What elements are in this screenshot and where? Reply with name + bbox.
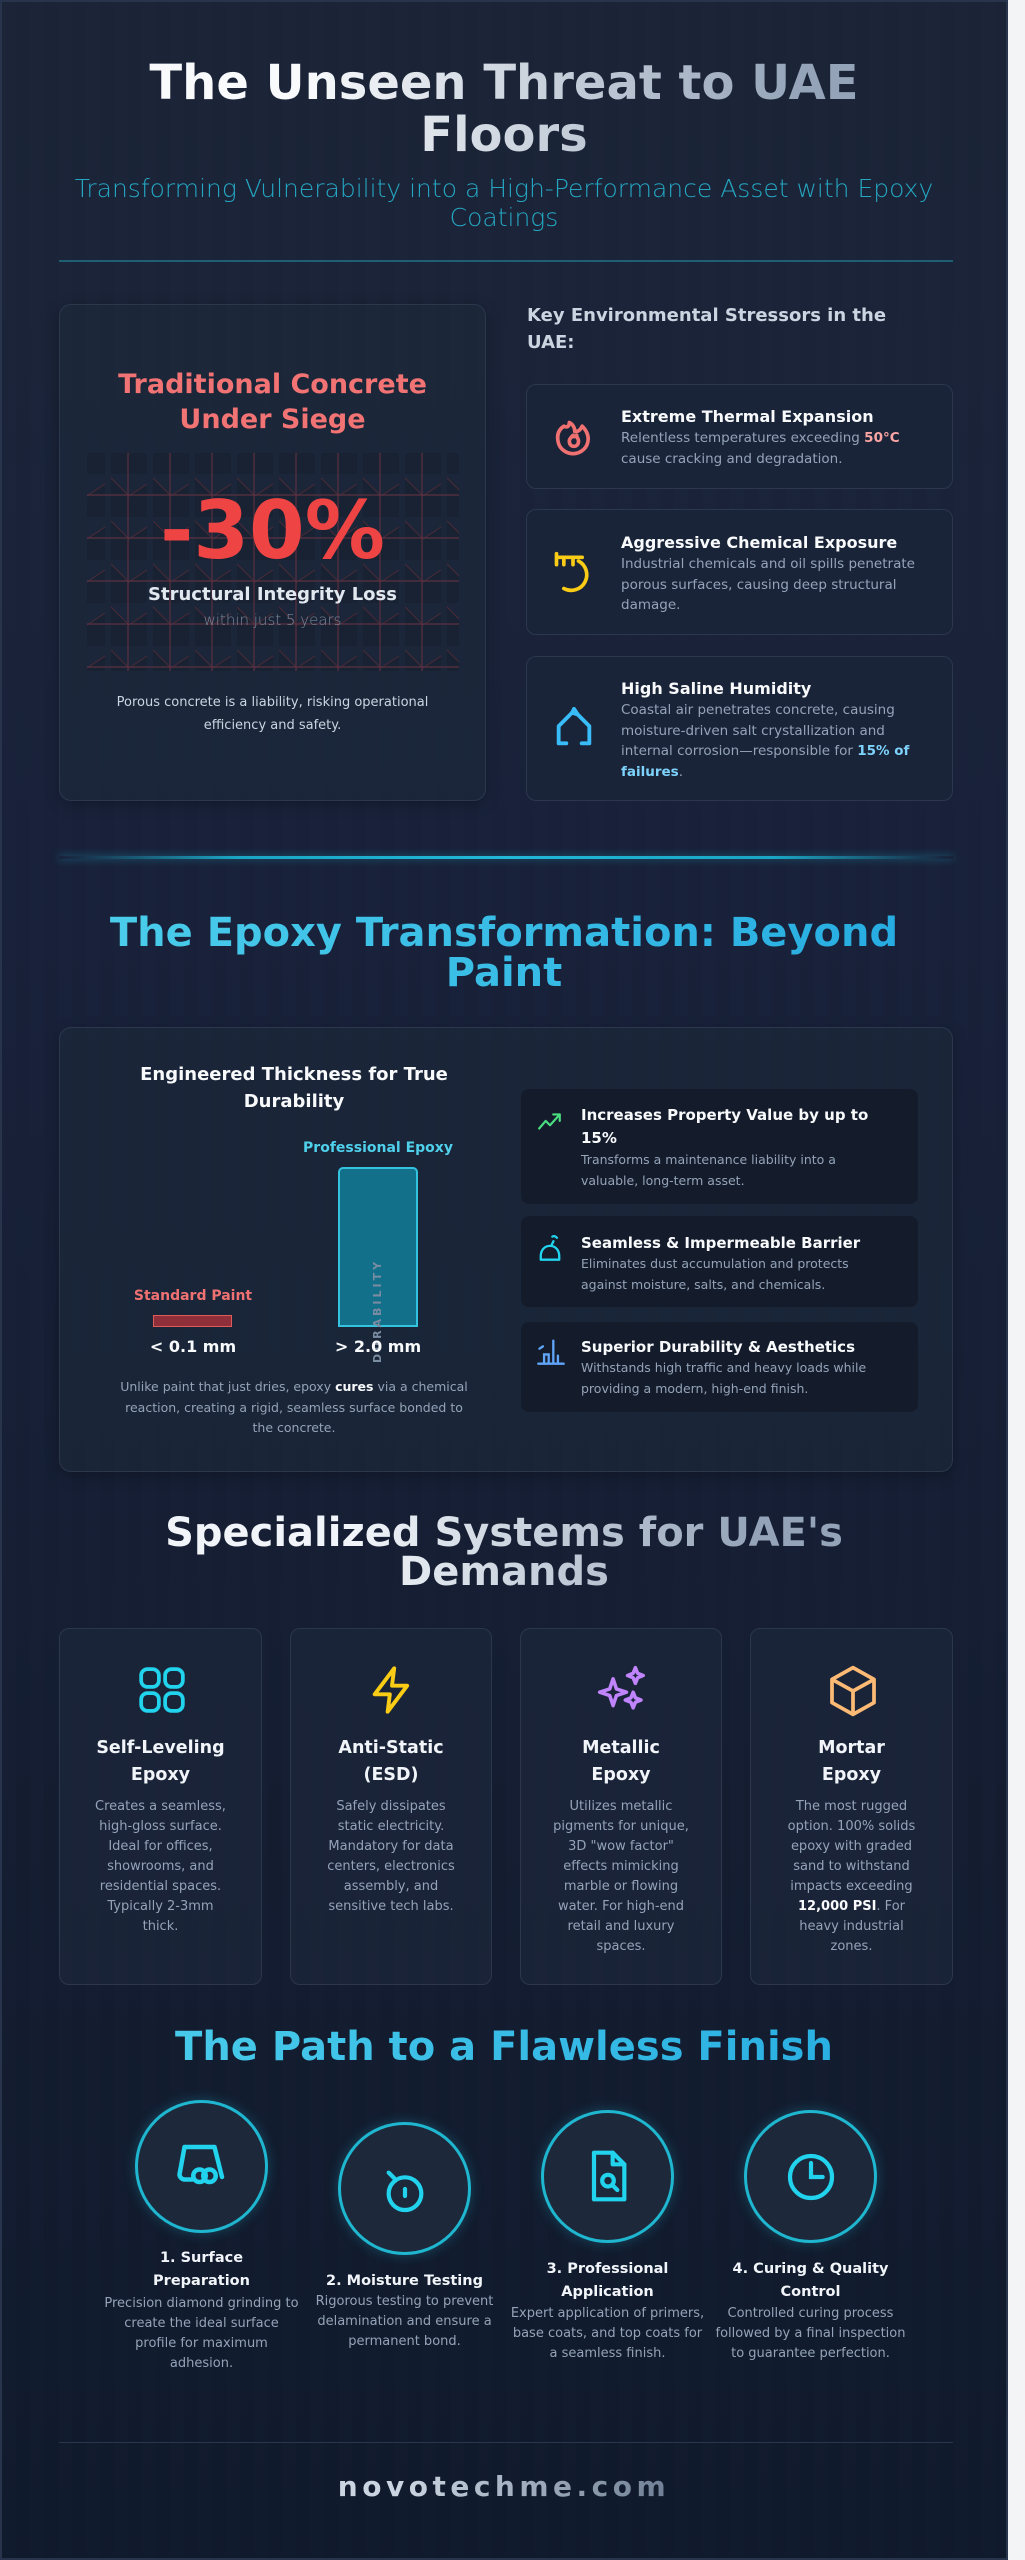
card: anti-static bbox=[290, 1628, 492, 1985]
title bbox=[2, 57, 1006, 161]
description: Porous concrete is a liability, risking operational bbox=[117, 695, 428, 710]
step description: to guarantee perfection. bbox=[731, 2346, 890, 2361]
icon: building chart bbox=[537, 1340, 565, 1365]
description: water. For high-end bbox=[558, 1899, 684, 1914]
step 4: curing & quality control bbox=[709, 2110, 912, 2370]
panel: traditional concrete bbox=[59, 304, 486, 801]
bar: paint bbox=[153, 1315, 232, 1327]
caption bbox=[120, 1379, 468, 1435]
footer: website: novotechme.com bbox=[338, 2470, 670, 2503]
description: heavy industrial bbox=[799, 1919, 904, 1934]
text: Transforms a maintenance liability into a bbox=[581, 1152, 836, 1167]
icon: shield barrier bbox=[540, 1235, 560, 1261]
description: Safely dissipates bbox=[336, 1799, 446, 1814]
title: Epoxy bbox=[822, 1765, 881, 1785]
text: Industrial chemicals and oil spills penetrate bbox=[621, 556, 915, 572]
step 2: moisture testing bbox=[316, 2117, 494, 2349]
section title: specialized systems: Demands bbox=[399, 1549, 609, 1595]
step title: 2. Moisture Testing bbox=[326, 2273, 483, 2289]
icon: cube bbox=[830, 1666, 876, 1716]
icon circle: clock bbox=[744, 2110, 877, 2243]
step description: adhesion. bbox=[170, 2356, 233, 2371]
heading: traditional concrete under siege bbox=[118, 369, 427, 435]
step description bbox=[511, 2306, 704, 2361]
description: 3D "wow factor" bbox=[568, 1839, 674, 1854]
section title: epoxy transformation: Paint bbox=[446, 950, 562, 996]
step description: Precision diamond grinding to bbox=[104, 2296, 299, 2311]
description: effects mimicking bbox=[563, 1859, 679, 1874]
description: Utilizes metallic bbox=[570, 1799, 672, 1814]
description: epoxy with graded bbox=[791, 1839, 912, 1854]
card: self-leveling bbox=[59, 1628, 262, 1985]
text: Withstands high traffic and heavy loads while bbox=[581, 1360, 866, 1375]
step 1: surface preparation bbox=[104, 2095, 299, 2371]
description: thick. bbox=[143, 1919, 178, 1934]
step description bbox=[104, 2296, 299, 2371]
card: property value bbox=[521, 1089, 918, 1204]
panel: epoxy comparison bbox=[59, 1027, 953, 1472]
text: Relentless temperatures exceeding 50°C bbox=[621, 430, 900, 446]
description: showrooms, and bbox=[107, 1859, 214, 1874]
icon circle: grinder bbox=[135, 2100, 268, 2233]
title: Mortar bbox=[818, 1738, 885, 1758]
step description: a seamless finish. bbox=[550, 2346, 665, 2361]
stat sublabel: within just 5 years bbox=[204, 611, 342, 629]
heading: key stressors: UAE: bbox=[527, 332, 574, 353]
step description: permanent bond. bbox=[348, 2334, 461, 2349]
description: pigments for unique, bbox=[553, 1819, 689, 1834]
description bbox=[553, 1799, 689, 1954]
heading: engineered thickness: Durability bbox=[244, 1091, 344, 1112]
card: saline humidity bbox=[526, 656, 953, 801]
text: cause cracking and degradation. bbox=[621, 450, 842, 466]
label: professional epoxy: Professional Epoxy bbox=[303, 1140, 453, 1156]
step title: Control bbox=[781, 2284, 840, 2300]
title bbox=[338, 1738, 444, 1785]
icon: house drop bbox=[556, 706, 592, 746]
card: chemical bbox=[526, 509, 953, 635]
bar chart: thickness bbox=[134, 1140, 453, 1363]
title: Metallic bbox=[582, 1738, 660, 1758]
description: option. 100% solids bbox=[788, 1819, 915, 1834]
description: zones. bbox=[831, 1939, 872, 1954]
footer: website bbox=[2, 2470, 1006, 2504]
step title bbox=[153, 2250, 250, 2289]
text: Superior Durability & Aesthetics bbox=[581, 1338, 855, 1356]
section title: specialized systems bbox=[2, 1514, 1006, 1592]
icon: trend up bbox=[538, 1113, 561, 1130]
text: Eliminates dust accumulation and protects bbox=[581, 1256, 849, 1271]
icon circle: stopwatch bbox=[338, 2122, 471, 2255]
title: Epoxy bbox=[131, 1765, 190, 1785]
title: The Unseen Threat to UAE bbox=[149, 55, 859, 111]
glow divider bbox=[59, 856, 953, 859]
description: spaces. bbox=[596, 1939, 646, 1954]
value labels: < 0.1 mm bbox=[150, 1337, 236, 1356]
heading: traditional concrete under siege: Under Siege bbox=[179, 404, 366, 435]
text bbox=[621, 533, 915, 613]
card: metallic bbox=[520, 1628, 722, 1985]
step 3: professional application bbox=[511, 2105, 704, 2361]
description bbox=[95, 1799, 226, 1934]
section title: path to flawless finish: The Path to a Flawless Finish bbox=[175, 2024, 833, 2070]
text bbox=[581, 1234, 860, 1292]
description bbox=[327, 1799, 455, 1914]
text: porous surfaces, causing deep structural bbox=[621, 576, 897, 592]
text: valuable, long-term asset. bbox=[581, 1172, 745, 1188]
step description: profile for maximum bbox=[135, 2336, 268, 2351]
description: Typically 2-3mm bbox=[107, 1899, 214, 1914]
step description: followed by a final inspection bbox=[716, 2326, 905, 2341]
description: centers, electronics bbox=[327, 1859, 455, 1874]
step title: 1. Surface bbox=[160, 2250, 243, 2266]
icon: sparkles bbox=[598, 1666, 645, 1710]
description: impacts exceeding bbox=[790, 1879, 913, 1894]
text: internal corrosion—responsible for 15% of bbox=[621, 743, 909, 759]
text: moisture-driven salt crystallization and bbox=[621, 722, 885, 738]
icon: flame bbox=[556, 420, 590, 456]
heading: engineered thickness: Engineered Thickness for True bbox=[140, 1064, 448, 1085]
text: 15% bbox=[581, 1129, 617, 1147]
title bbox=[582, 1738, 660, 1785]
description: static electricity. bbox=[338, 1819, 444, 1834]
stat: -30%: -30% bbox=[160, 484, 385, 577]
step description: delamination and ensure a bbox=[317, 2314, 492, 2329]
text: High Saline Humidity bbox=[621, 679, 811, 698]
text: providing a modern, high-end finish. bbox=[581, 1380, 808, 1396]
bar chart: thickness: > 2.0 mm bbox=[335, 1337, 421, 1356]
description: assembly, and bbox=[344, 1879, 438, 1894]
label: durability vertical: DURABILITY bbox=[371, 1259, 384, 1363]
caption: the concrete. bbox=[253, 1420, 335, 1435]
step description bbox=[316, 2294, 494, 2349]
title: Anti-Static bbox=[338, 1738, 444, 1758]
caption: reaction, creating a rigid, seamless surface bonded to bbox=[125, 1400, 463, 1414]
description: marble or flowing bbox=[564, 1879, 678, 1894]
step description: Expert application of primers, bbox=[511, 2306, 704, 2321]
description: Mandatory for data bbox=[328, 1839, 454, 1854]
bar: epoxy bbox=[338, 1167, 418, 1327]
description: retail and luxury bbox=[568, 1919, 674, 1934]
description: residential spaces. bbox=[100, 1879, 221, 1894]
description: high-gloss surface. bbox=[99, 1819, 222, 1834]
section title: epoxy transformation bbox=[2, 913, 1006, 993]
step title: 4. Curing & Quality bbox=[733, 2261, 888, 2277]
icon: grid bbox=[139, 1667, 185, 1713]
heading: key stressors: Key Environmental Stressors in the bbox=[527, 305, 886, 326]
step title: Application bbox=[561, 2284, 654, 2300]
step title: 3. Professional bbox=[547, 2261, 668, 2277]
text: Seamless & Impermeable Barrier bbox=[581, 1234, 860, 1252]
stat label: Structural Integrity Loss bbox=[148, 584, 397, 605]
text bbox=[581, 1338, 866, 1396]
title bbox=[818, 1738, 885, 1785]
label: standard paint: Standard Paint bbox=[134, 1288, 252, 1304]
title: Floors bbox=[420, 107, 588, 163]
heading: key stressors bbox=[527, 305, 886, 353]
subtitle: Transforming Vulnerability into a High-Performance Asset with Epoxy bbox=[75, 174, 933, 203]
step description bbox=[704, 2304, 917, 2364]
text: against moisture, salts, and chemicals. bbox=[581, 1276, 825, 1292]
section title: path to flawless finish bbox=[2, 2025, 1006, 2069]
subtitle bbox=[75, 174, 933, 232]
description bbox=[788, 1799, 915, 1954]
text bbox=[621, 679, 910, 780]
description: Ideal for offices, bbox=[108, 1839, 213, 1854]
section title: epoxy transformation: The Epoxy Transformation: Beyond bbox=[110, 910, 898, 956]
title: Epoxy bbox=[591, 1765, 651, 1785]
text: damage. bbox=[621, 597, 680, 613]
card: durability aesthetics bbox=[521, 1322, 918, 1412]
icon circle: document search bbox=[541, 2110, 674, 2243]
icon: chemical bbox=[554, 552, 589, 592]
step description: Rigorous testing to prevent bbox=[316, 2294, 493, 2309]
text: Increases Property Value by up to bbox=[581, 1106, 868, 1124]
step title bbox=[547, 2261, 668, 2300]
section title: specialized systems: Specialized Systems for UAE's bbox=[165, 1510, 843, 1556]
subtitle: Coatings bbox=[450, 203, 558, 232]
icon: lightning bbox=[372, 1666, 410, 1714]
title bbox=[96, 1738, 225, 1785]
description: efficiency and safety. bbox=[204, 718, 341, 733]
text bbox=[580, 1106, 868, 1188]
text bbox=[621, 407, 900, 466]
card: seamless barrier bbox=[521, 1216, 918, 1307]
description: 12,000 PSI. For bbox=[798, 1899, 905, 1914]
text: Coastal air penetrates concrete, causing bbox=[621, 702, 895, 718]
step description: create the ideal surface bbox=[124, 2316, 279, 2331]
description bbox=[117, 695, 428, 733]
step description: base coats, and top coats for bbox=[513, 2326, 702, 2341]
text: failures. bbox=[621, 764, 683, 780]
description: sensitive tech labs. bbox=[328, 1899, 454, 1914]
step title bbox=[709, 2258, 912, 2304]
heading: traditional concrete under siege: Traditional Concrete bbox=[118, 369, 427, 400]
heading: engineered thickness bbox=[140, 1064, 448, 1112]
text: Extreme Thermal Expansion bbox=[621, 407, 874, 426]
description: sand to withstand bbox=[793, 1859, 910, 1874]
caption: Unlike paint that just dries, epoxy cures via a chemical bbox=[120, 1379, 468, 1394]
card: mortar bbox=[750, 1628, 953, 1985]
step title: Preparation bbox=[153, 2273, 250, 2289]
description: The most rugged bbox=[796, 1799, 907, 1814]
title: (ESD) bbox=[363, 1765, 419, 1785]
description: Creates a seamless, bbox=[95, 1799, 226, 1814]
step description: Controlled curing process bbox=[728, 2306, 893, 2321]
cracked grid pattern bbox=[87, 453, 459, 671]
title: Self-Leveling bbox=[96, 1738, 225, 1758]
card: thermal bbox=[526, 384, 953, 489]
text: Aggressive Chemical Exposure bbox=[621, 533, 897, 552]
